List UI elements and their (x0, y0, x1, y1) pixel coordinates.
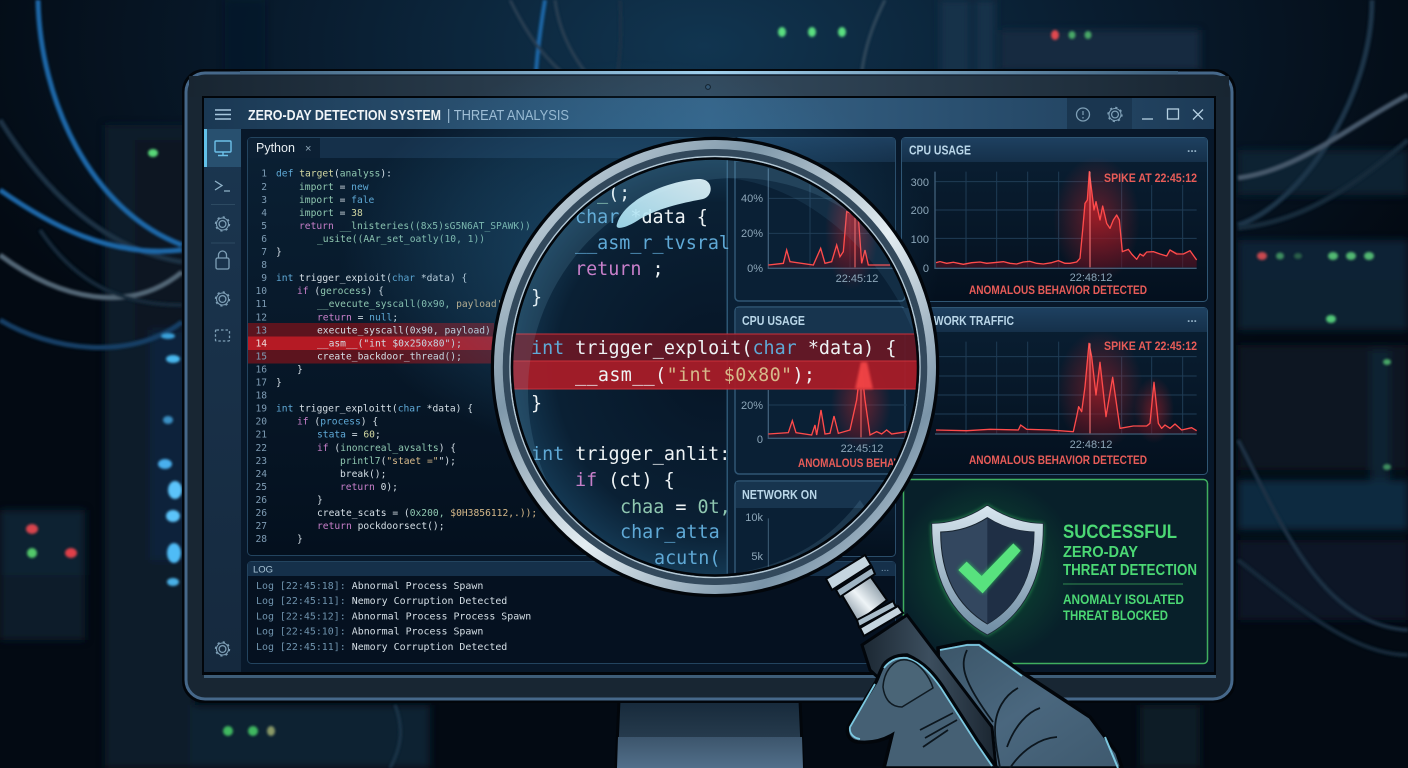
line numbers: 6 (261, 234, 267, 245)
magnified axis labels: 0% (747, 263, 763, 275)
screen (204, 60, 1214, 672)
magnified content (505, 137, 944, 606)
panel: log (248, 562, 896, 664)
line numbers (255, 169, 267, 545)
spike label: SPIKE AT 22:45:12 (1104, 171, 1197, 185)
code text: import = fale (299, 195, 375, 206)
spike label: SPIKE AT 22:45:12 (1104, 339, 1197, 353)
line numbers: 16 (255, 364, 267, 376)
log entries (256, 581, 531, 653)
log entries: Log [22:45:18]: Abnormal Process Spawn (256, 581, 483, 592)
code text: } (317, 495, 323, 506)
magnified panel headings: 2%WVITY (840, 143, 887, 158)
magnified code: } (531, 287, 542, 308)
panel: activity (edge behind lens) (736, 138, 896, 302)
icon: settings (1108, 108, 1122, 122)
line numbers: 25 (255, 482, 267, 493)
magnified content: NETWORK ON (742, 487, 817, 502)
icon: cloud gear (216, 217, 230, 231)
editor tab: Python (256, 141, 295, 155)
icon: selection (216, 330, 230, 341)
status text: THREAT DETECTION (1063, 562, 1197, 579)
code text: stata = 60; (317, 430, 381, 441)
code text: if (process) { (297, 417, 378, 428)
icon: lock (216, 251, 229, 269)
thumb and finger (847, 655, 997, 768)
panel: network traffic: ... (1187, 311, 1197, 325)
line numbers: 3 (261, 195, 267, 206)
status text: ZERO-DAY (1063, 544, 1138, 561)
icon: monitor (215, 141, 231, 156)
line numbers: 14 (255, 338, 267, 349)
code text: create_scats = (0x200, $0H3856112,.)); (317, 508, 537, 519)
magnified axis labels: 0 (757, 434, 763, 446)
panel: log: ... (881, 563, 889, 574)
line numbers: 19 (255, 404, 267, 415)
title bar (204, 98, 1214, 129)
webcam (706, 85, 710, 89)
line numbers: 2 (261, 182, 267, 193)
magnified axis labels: 20% (741, 400, 763, 412)
code text: import = 38 (299, 208, 363, 219)
icon: info (1076, 108, 1090, 121)
editor tab: × (305, 143, 311, 155)
magnified code: int trigger_exploit(char *data) { (531, 338, 896, 359)
code text: } (297, 534, 303, 545)
line numbers: 7 (261, 247, 267, 258)
code text: } (276, 247, 282, 258)
panel: cpu usage left (edge behind lens) (736, 308, 896, 474)
line numbers: 22 (255, 443, 267, 454)
sidebar (204, 129, 241, 672)
line numbers: 4 (261, 208, 267, 219)
magnified content: ANOMALOUS BEHAVIOR (798, 456, 918, 470)
code text: printl7("staet =""); (340, 456, 456, 467)
code text: __evecute_syscall(0x90, payload' (317, 299, 502, 310)
magnified content: CPU USAGE (742, 313, 805, 328)
magnified code: chaa = 0t, (620, 497, 731, 518)
code text: } (297, 364, 303, 376)
status text: THREAT BLOCKED (1063, 607, 1168, 623)
monitor stand (616, 700, 803, 768)
log entries: Log [22:45:11]: Nemory Corruption Detected (256, 596, 507, 607)
anomaly label: ANOMALOUS BEHAVIOR DETECTED (969, 283, 1147, 297)
line numbers: 26 (255, 508, 267, 519)
time label: 22:48:12 (1070, 272, 1112, 284)
magnified code: } (531, 393, 542, 414)
magnified code (531, 183, 896, 569)
code text: __asm__("int $0x250x80"); (317, 338, 462, 349)
magnified axis labels: 5k (751, 551, 763, 563)
heading: system title: ZERO-DAY DETECTION SYSTEM (248, 107, 441, 124)
line numbers: 21 (255, 430, 267, 441)
line numbers: 15 (255, 351, 267, 362)
magnified code: return ; (575, 259, 664, 280)
magnified code: __asm__("int $0x80"); (575, 365, 815, 386)
line numbers: 17 (255, 378, 267, 388)
panel: success status (895, 478, 1208, 664)
glass reflection (513, 160, 914, 572)
magnified axis labels (741, 193, 883, 563)
line numbers: 11 (255, 299, 267, 310)
magnifier handle (826, 555, 903, 636)
line numbers: 9 (261, 273, 267, 284)
line numbers: 26 (255, 495, 267, 506)
hand holding magnifier (847, 615, 1122, 768)
highlighted code lines (248, 323, 494, 364)
code text: } (276, 378, 282, 388)
lens ring (492, 138, 938, 596)
code text: return __lnisteries((8x5)sG5N6AT_SPAWK)) (299, 221, 531, 232)
magnified axis labels: 10k (745, 512, 763, 524)
icon: terminal (215, 181, 230, 191)
code text: return = null; (317, 312, 398, 323)
line numbers: 5 (261, 221, 267, 232)
magnified axis labels: 22:45:12 (836, 273, 878, 285)
anomaly label: ANOMALOUS BEHAVIOR DETECTED (969, 453, 1147, 467)
magnified axis labels: 40% (741, 193, 763, 205)
status text (1063, 522, 1197, 623)
code text: create_backdoor_thread(); (317, 351, 462, 362)
magnified axis labels: 22:45:12 (841, 443, 883, 455)
panel: cpu usage: ... (1187, 141, 1197, 155)
code text: import = new (299, 182, 369, 193)
line numbers: 12 (255, 312, 267, 323)
panel heading: CPU USAGE (909, 142, 971, 158)
line numbers: 10 (255, 286, 267, 297)
magnified code: if (ct) { (575, 470, 675, 491)
screen glow around lens (340, 60, 940, 460)
code text: break(); (340, 469, 386, 480)
line numbers: 27 (255, 521, 267, 532)
magnified code: acutn( (654, 548, 720, 569)
heading: section name: | THREAT ANALYSIS (447, 107, 569, 124)
thumbnail (883, 660, 933, 707)
axis labels: 100 (911, 234, 929, 246)
code text: if (inoncreal_avsalts) { (317, 443, 456, 454)
status text: SUCCESSFUL (1063, 522, 1177, 543)
axis labels: 300 (911, 177, 929, 189)
magnified code: char_atta (620, 522, 720, 543)
magnified chart: cpu (768, 390, 907, 567)
code text: if (gerocess) { (297, 286, 384, 297)
code text: int trigger_exploitt(char *data) { (276, 404, 473, 415)
magnified axis labels: 20% (741, 228, 763, 240)
magnified panel frames (734, 160, 906, 573)
panel: code editor (248, 138, 738, 556)
line numbers: 13 (255, 325, 267, 336)
line numbers: 23 (255, 456, 267, 467)
log entries: Log [22:45:11]: Nemory Corruption Detected (256, 642, 507, 653)
palm (938, 642, 1122, 768)
icon: settings (216, 292, 230, 306)
axis labels: 200 (911, 205, 929, 217)
code text: _usite((AAr_set_oatly(10, 1)) (317, 234, 485, 245)
line numbers: 8 (261, 260, 267, 271)
code text: execute_syscall(0x90, payload) (317, 325, 491, 336)
line numbers: 18 (255, 391, 267, 402)
magnified code: __asm_r_tvsral (575, 233, 730, 254)
chart: cpu spike (935, 157, 1197, 283)
axis labels: 0 (923, 263, 929, 275)
code text: return 0); (340, 482, 398, 493)
panel: network traffic (902, 308, 1208, 474)
status text: ANOMALY ISOLATED (1063, 591, 1184, 607)
panel heading: NETWORK TRAFFIC (913, 313, 1014, 328)
time label: 22:48:12 (1070, 439, 1112, 451)
editor tab (248, 138, 320, 158)
creases (920, 650, 1057, 768)
icon: menu (215, 110, 231, 119)
log entries: Log [22:45:10]: Abnormal Process Spawn (256, 627, 483, 638)
panel: network left (edge behind lens) (736, 482, 896, 556)
magnified highlight bands (505, 334, 925, 389)
chart: network spikes (935, 330, 1197, 450)
window controls (1142, 109, 1203, 120)
log entries: Log [22:45:12]: Abnormal Process Process Spawn (256, 611, 531, 622)
magnified code: int trigger_anlit: (531, 444, 730, 465)
panel: cpu usage (902, 138, 1208, 302)
line numbers: 28 (255, 534, 267, 545)
axis labels (911, 177, 929, 275)
code text: int trigger_expioit(char *data) { (276, 273, 467, 284)
icon: settings bottom (216, 642, 230, 656)
icon: shield with check (932, 505, 1043, 635)
code text: return pockdoorsect(); (317, 521, 444, 532)
magnified chart: activity (768, 168, 893, 290)
handle grip (862, 615, 996, 768)
magnified code: char *data { (575, 207, 708, 228)
monitor frame (182, 69, 1236, 703)
code text (276, 169, 537, 545)
magnified code: _(; (597, 183, 630, 204)
magnifying lens (492, 137, 944, 606)
line numbers: 20 (255, 417, 267, 428)
code text: def target(analyss): (276, 169, 392, 180)
panel: log: LOG (253, 564, 273, 576)
line numbers: 24 (255, 469, 267, 480)
line numbers: 1 (261, 169, 267, 180)
